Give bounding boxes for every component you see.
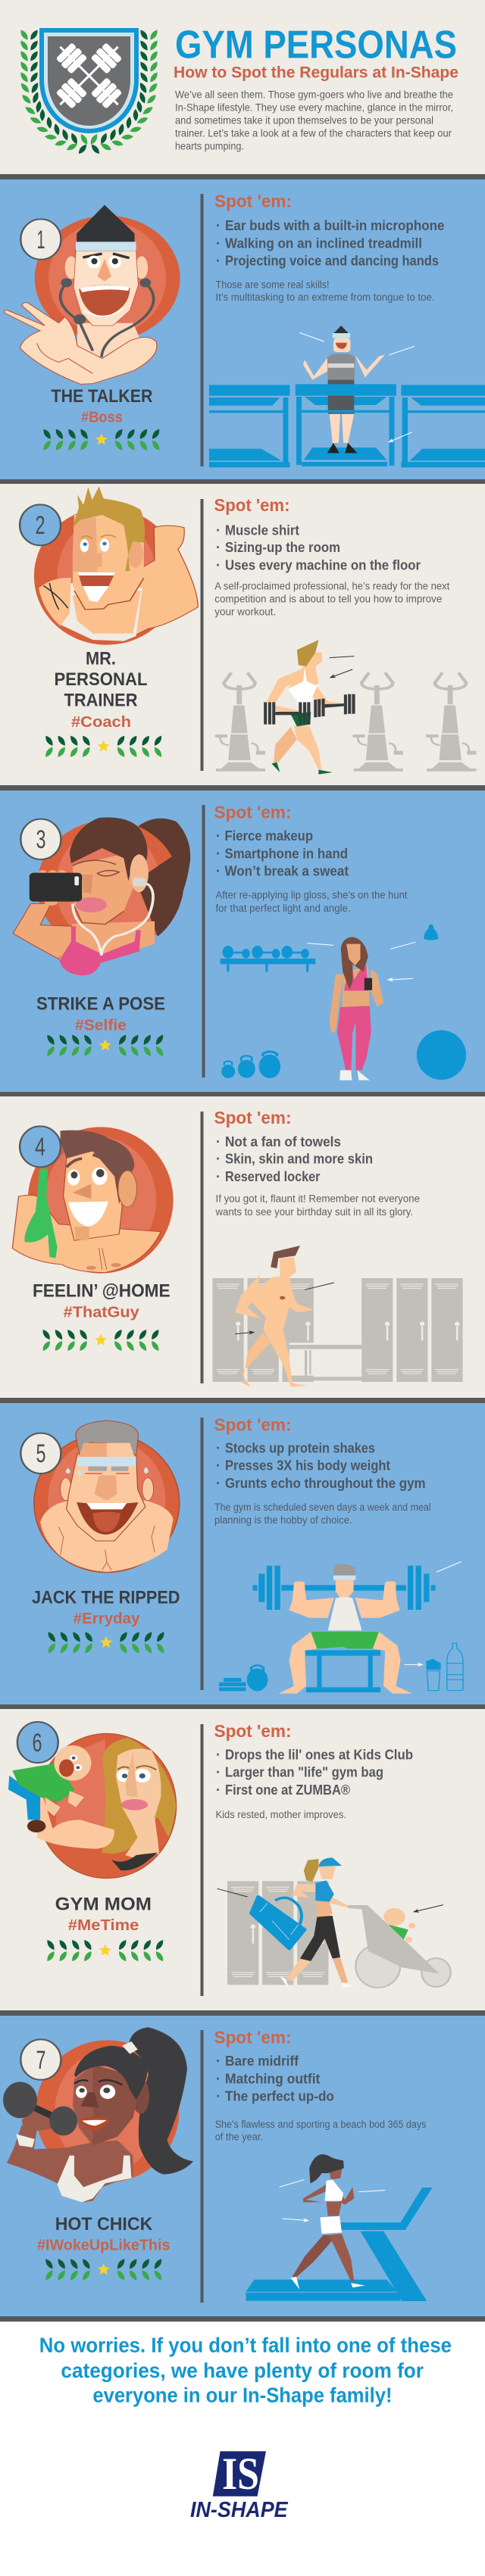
logo: In-Shape: IS [222, 2449, 259, 2499]
illustration: man pressing barbell [219, 1561, 463, 1694]
bullet list: · [216, 2071, 221, 2086]
logo: In-Shape [190, 2449, 289, 2522]
bullet list: Fierce makeup [224, 828, 313, 844]
badge number 3: 3 [36, 825, 45, 854]
badge number 1: 1 [36, 226, 45, 254]
panel: 6 gym mom [0, 1704, 485, 2010]
description: Those are some real skills! [215, 279, 329, 291]
panel: 4 feelin at home [0, 1092, 485, 1398]
bullet list: First one at ZUMBA® [225, 1782, 350, 1798]
description: If you got it, flaunt it! Remember not everyone [215, 1193, 420, 1205]
description [215, 279, 435, 303]
logo: In-Shape: IN-SHAPE [190, 2498, 289, 2522]
illustration: mom with gym bag and stroller [217, 1857, 451, 1990]
illustration: trainer with dumbbells [215, 640, 477, 775]
icon: leaf and star divider [42, 428, 161, 452]
bullet list: · [216, 1782, 221, 1798]
bullet list: · [216, 1476, 221, 1491]
description: of the year. [215, 2132, 263, 2143]
intro text: and sometimes take it upon themselves to be your personal [175, 114, 433, 126]
intro text: We’ve all seen them. Those gym-goers who live and breathe the [175, 88, 453, 100]
bullet list: Smartphone in hand [224, 846, 348, 861]
bullet list: Reserved locker [225, 1169, 320, 1184]
description: wants to see your birthday suit in all its glory. [215, 1206, 413, 1218]
portrait: hot chick [3, 2027, 193, 2202]
persona name [55, 648, 148, 711]
icon: laurel wreath [19, 29, 159, 155]
bullet list: Drops the lil' ones at Kids Club [225, 1747, 413, 1762]
persona name: PERSONAL [55, 669, 148, 690]
closing message [39, 2334, 452, 2407]
bullet list: · [216, 1747, 221, 1762]
hashtag: #MeTime [68, 1917, 139, 1934]
description [215, 890, 408, 914]
header panel [0, 0, 485, 174]
portrait: the talker [5, 205, 180, 384]
description: competition and is about to tell you how to improve [214, 594, 442, 605]
hashtag: #Boss [81, 410, 123, 426]
bullet list: Skin, skin and more skin [225, 1152, 373, 1167]
bullet list: · [216, 2088, 221, 2104]
icon: leaf and star divider [44, 734, 164, 759]
bullet list: Sizing-up the room [225, 540, 340, 555]
intro text [175, 88, 453, 151]
bullet list [216, 218, 444, 269]
icon: leaf and star divider [41, 1328, 161, 1352]
bullet list: · [216, 235, 221, 251]
spot heading: Spot 'em: [214, 1108, 291, 1127]
bullet list: Larger than "life" gym bag [225, 1765, 383, 1780]
icon: leaf and star divider [45, 1034, 165, 1058]
illustration: woman running on treadmill [246, 2154, 433, 2301]
bullet list: Matching outfit [225, 2071, 320, 2086]
bullet list: · [216, 1458, 221, 1474]
illustration: man in locker room [212, 1246, 463, 1387]
bullet list: · [216, 218, 221, 233]
bullet list [216, 1134, 373, 1184]
spot heading: Spot 'em: [214, 1414, 291, 1434]
icon: leaf and star divider [45, 1938, 165, 1963]
bullet list: Bare midriff [225, 2054, 299, 2069]
bullet list: · [216, 1765, 221, 1780]
closing message: everyone in our In-Shape family! [92, 2384, 393, 2407]
bullet list: Presses 3X his body weight [225, 1458, 390, 1474]
closing message: No worries. If you don’t fall into one of these [39, 2334, 452, 2357]
bullet list: Walking on an inclined treadmill [225, 235, 422, 251]
bullet list [216, 2054, 334, 2104]
bullet list [216, 828, 349, 879]
description: Kids rested, mother improves. [215, 1809, 346, 1820]
panel: 7 hot chick [0, 2010, 485, 2316]
description [215, 1193, 420, 1218]
icon: shield with crossed barbells [39, 28, 139, 133]
hashtag: #Coach [71, 714, 131, 731]
description: for that perfect light and angle. [215, 903, 350, 914]
description [214, 1502, 431, 1526]
panel: 3 strike a pose [0, 785, 485, 1092]
bullet list: · [216, 1134, 221, 1149]
panel: closing footer [0, 2316, 485, 2576]
bullet list: · [216, 2054, 221, 2069]
persona name: TRAINER [64, 691, 138, 711]
description: It’s multitasking to an extreme from tongue to toe. [215, 292, 435, 303]
description: The gym is scheduled seven days a week and meal [214, 1502, 431, 1513]
description: After re-applying lip gloss, she’s on the hunt [215, 890, 408, 901]
subtitle: How to Spot the Regulars at In-Shape [174, 64, 458, 82]
bullet list: Projecting voice and dancing hands [225, 254, 439, 269]
bullet list: · [216, 1441, 221, 1456]
badge number 4: 4 [35, 1133, 45, 1162]
spot heading: Spot 'em: [214, 803, 291, 822]
bullet list: Uses every machine on the floor [225, 557, 421, 572]
bullet list: The perfect up-do [225, 2088, 334, 2104]
persona name: FEELIN’ @HOME [33, 1281, 171, 1302]
persona name: HOT CHICK [55, 2214, 153, 2235]
closing message: categories, we have plenty of room for [61, 2359, 424, 2382]
bullet list: Stocks up protein shakes [225, 1441, 375, 1456]
bullet list: Not a fan of towels [225, 1134, 341, 1149]
portrait: jack the ripped [20, 1421, 180, 1573]
persona name: THE TALKER [52, 386, 153, 407]
intro text: In-Shape lifestyle. They use every machine, glance in the mirror, [175, 101, 453, 114]
spot heading: Spot 'em: [214, 1721, 291, 1741]
bullet list [216, 1747, 413, 1798]
portrait: feelin at home [12, 1126, 174, 1274]
bullet list: Grunts echo throughout the gym [225, 1476, 426, 1491]
spot heading: Spot 'em: [214, 495, 289, 515]
panel: 2 mr personal trainer [0, 479, 485, 785]
persona name: MR. [86, 648, 116, 669]
hashtag: #IWokeUpLikeThis [37, 2238, 170, 2254]
panel: 5 jack the ripped [0, 1398, 485, 1704]
bullet list: · [216, 1152, 221, 1167]
bullet list: Ear buds with a built-in microphone [225, 218, 444, 233]
description: your workout. [214, 606, 276, 617]
icon: leaf and star divider [44, 2257, 164, 2281]
badge number 7: 7 [36, 2046, 45, 2075]
persona name: GYM MOM [55, 1894, 152, 1914]
bullet list: · [216, 1169, 221, 1184]
persona name: JACK THE RIPPED [32, 1588, 180, 1608]
bullet list: · [216, 864, 221, 879]
hashtag: #ThatGuy [64, 1304, 140, 1321]
hashtag: #Selfie [75, 1018, 127, 1034]
hashtag: #Erryday [74, 1611, 140, 1627]
bullet list: · [216, 557, 221, 572]
bullet list: · [216, 828, 221, 844]
portrait: mr personal trainer [20, 487, 198, 645]
bullet list: · [216, 846, 221, 861]
icon: leaf and star divider [46, 1630, 166, 1654]
spot heading: Spot 'em: [214, 192, 292, 211]
intro text: trainer. Let’s take a look at a few of the characters that keep our [175, 126, 452, 139]
bullet list: · [216, 254, 221, 269]
persona name: STRIKE A POSE [36, 993, 165, 1014]
badge number 5: 5 [36, 1439, 45, 1468]
bullet list: Won’t break a sweat [224, 864, 349, 879]
badge number 6: 6 [32, 1729, 42, 1757]
description: She’s flawless and sporting a beach bod 365 days [215, 2119, 427, 2130]
intro text: hearts pumping. [175, 139, 244, 151]
bullet list: Muscle shirt [225, 522, 299, 538]
panel: 1 the talker [0, 174, 485, 479]
description [214, 580, 450, 617]
bullet list: · [216, 540, 221, 555]
description: planning is the hobby of choice. [214, 1514, 352, 1526]
portrait: strike a pose [13, 817, 190, 975]
description [215, 2119, 427, 2143]
illustration: selfie woman with gym equipment [221, 925, 466, 1081]
bullet list [216, 522, 421, 572]
portrait: gym mom [8, 1722, 177, 1879]
bullet list [216, 1441, 426, 1491]
spot heading: Spot 'em: [214, 2027, 291, 2047]
description: A self-proclaimed professional, he’s ready for the next [214, 580, 450, 591]
badge number 2: 2 [35, 511, 45, 540]
illustration: talker on treadmill [209, 326, 485, 467]
bullet list: · [216, 522, 221, 538]
